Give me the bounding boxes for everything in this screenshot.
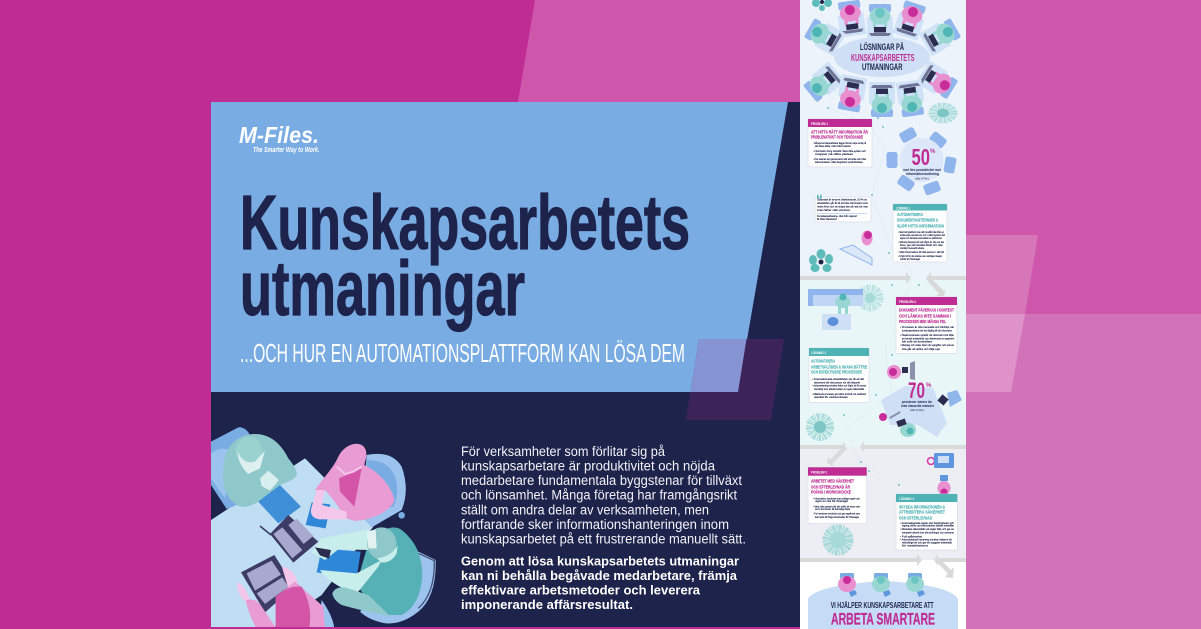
card: solution 3: mänskliga fel och ger ett tryggare arbetssätt [902,540,952,544]
card: solution 1: • Sökning baserat på vad något är, inte var det [898,240,944,244]
text block: intro: och lönsamhet. Många företag har framgångsrikt [461,488,737,503]
card: solution 3: komplett historik över alla ändringar och versioner [902,530,954,534]
card: problem 1: ATT HITTA RÄTT INFORMATION ÄR [811,128,868,134]
table [211,458,373,629]
text block: intro: ställt om andra delar av verksamheten, men [461,502,709,517]
card: solution 3: för medarbetarna [902,544,929,548]
card: solution 2 [809,348,869,402]
person: top left, teal [211,427,301,523]
card: solution 3: SKYDDA INFORMATIONEN & [899,504,945,509]
person: bottom right, teal [312,527,436,623]
card: problem 3: ARBETET MED SÄKERHET [811,478,854,484]
card: solution 3: • Automatiserade regler styr behörigheter och [900,521,954,525]
card: solution 3: LÖSNING 3 [899,496,914,501]
text block: intro: kunskapsarbetet på ett frustrerande manuellt sätt. [461,532,746,546]
logo: M-Files: The Smarter Way to Work. [253,147,320,154]
card: problem 2: blir svår att kontrollera [902,339,933,343]
card: problem 3: POÄNG I WORKOKOCKE [811,488,851,494]
card: problem 2: PROCESSER MED MÅNGA FEL [899,318,946,324]
card: solution 2: LÖSNING 2 [811,350,826,355]
card: solution 2: samtidigt som efterlevnaden av regler säkerställs [814,387,865,391]
panel: light blue title area [211,102,788,392]
icon: blue chair person [937,390,962,407]
card: problem 3: utgör en risk för företaget [815,499,848,503]
icon: teal person at laptop [896,418,916,437]
card: problem 3: som kommer åt känslig data [815,507,851,511]
stat: 70 percent [879,361,962,437]
text block: intro: medarbetare fundamentala byggstenar för tillväxt [461,473,742,488]
title: utmaningar [240,246,525,332]
quote card: inte hittar rätt version. [817,208,851,212]
stat: 70 percent: % [926,383,932,389]
card: problem 2 [896,297,957,354]
text block: bold conclusion: effektivare arbetsmetoder och leverera [461,582,701,598]
laptop [260,515,318,563]
title [240,180,690,332]
card: solution 2: • Automatisering minskar felen och frigör tid för annat [812,384,866,388]
logo: M-Files: M-Files. [239,122,319,148]
text block: bold conclusion: imponerande affärsresultat. [461,597,633,612]
icon: pink person left [879,411,901,421]
card: problem 3 [808,467,867,523]
card: solution 1: värde för företaget [900,257,920,261]
stat: 50 percent: informationssökning [906,172,939,176]
card: solution 3 [896,494,957,550]
icon: pink person with blue laptop [938,475,950,496]
panel: closing section [808,573,958,629]
card: solution 1: • Frigör tid för det arbete som verkligen skapar [898,254,942,258]
card: solution 1 [893,204,947,262]
card: problem 2: ett korrekt arbetsflöde och efterlevnad av regelverk [902,336,955,340]
card: solution 1: onödigt manuellt arbete [900,246,924,250]
background: lighter parallelogram top [518,0,1201,314]
card: problem 1 [808,119,872,167]
card: problem 2: DOKUMENT PÅVERKAS I KONTEXT [899,307,954,313]
subtitle: ...OCH HUR EN AUTOMATIONSPLATTFORM KAN LÖSA DEM [240,340,685,368]
panel: infographic thumbnail strip [800,0,966,629]
card: problem 2: • Ökade kostnader uppstår när dokument inte följer [900,333,954,337]
stat: 50 percent [886,126,957,196]
card: problem 3: • Fel versioner används och ger regelbrott som [813,512,861,516]
quote card: M-Files Research [817,217,837,221]
card: problem 2: • Processer är ofta manuella och fördröjs när [900,325,954,329]
text block: intro [461,444,746,546]
text block: intro: kunskapsarbetare är produktivitet och nöjda [461,458,715,474]
card: solution 1: enda plats oavsett var och i vilket system det [900,233,945,237]
illustration: people around a table [211,427,436,629]
card: problem 1: att leta efter rätt information [815,144,852,148]
accent parallelogram [686,339,784,420]
card: solution 1: AUTOMATISERA [897,212,923,217]
card: solution 2: resultat för verksamheten [814,395,849,399]
tablet [241,555,288,612]
closing headline: ARBETA SMARTARE [831,610,935,628]
card: problem 3: kan leda till höga kostnader för företaget [815,515,859,519]
card: problem 2: PROBLEM 2 [899,300,916,304]
card: solution 2: AUTOMATISERA [811,359,835,364]
oval title: KUNSKAPSARBETETS [851,53,915,64]
card: problem 1: • Det saknas ett gemensamt sätt att söka och hitta [813,157,866,161]
stat: 50 percent: % [930,149,936,155]
card: solution 1: • Rätt information till rätt person i rätt tid [898,250,944,254]
stat: 70 percent: (källa: M-Files) [910,409,924,412]
person: bottom, pink [237,566,334,629]
panel: report cover [211,102,800,629]
quote card: Kunskapsarbetare, citat från rapport [817,214,857,218]
oval title: LÖSNINGAR PÅ [860,42,904,52]
card: problem 1: PROBLEM 1 [811,122,828,126]
icon: pink person at laptop [887,361,915,380]
card: solution 3: • Full spårbarhet [900,534,922,538]
stat: 70 percent: presterar sämre än [902,400,932,404]
card: solution 2: dokument når rätt person vid rätt tidpunkt [814,380,860,384]
stat: 70 percent: 70 [908,378,925,403]
quote card: redan finns och att skapa den på nytt när man [817,204,868,208]
icon: bench with person and desk [808,289,863,330]
card: solution 1: SLIPP HITTA INFORMATION [897,224,945,228]
background: small translucent parallelogram [960,235,1038,392]
background: lighter lower right band [966,314,1201,629]
card: solution 2: OCH EFFEKTIVARE PROCESSER [811,369,862,374]
connector dots [827,78,920,486]
closing headline: VI HJÄLPER KUNSKAPSARBETARE ATT [831,601,934,610]
card: problem 2: inte går att spåra och följa upp [902,347,941,351]
card: problem 2: kunskapsarbetare inte har tillgång till rätt information [902,329,952,333]
text block: intro: fortfarande sker informationshanteringen inom [461,517,729,532]
people at closing table [838,573,925,597]
quote card: arbetstiden går åt till att hitta information som [817,201,869,205]
separator arrows [800,272,966,578]
card: solution 3: OCH EFTERLEVNAD [899,515,932,520]
people around oval table [802,0,962,118]
card: solution 1: lagras och hanteras automatiskt av plattformen [900,236,942,240]
card: solution 1: finns, ger rätt resultat direkt och utan [900,243,943,247]
quote card: Sökandet är enormt tidskrävande, 50 % av [817,198,868,202]
card: solution 3: • Metadata säkerställer att regler följs och ger en [900,527,954,531]
oval title: UTMANINGAR [862,62,903,72]
card: problem 1: • Många kunskapsarbetare lägger timmar varje vecka på [813,141,866,145]
card: problem 3: • Information hanteras utan tydliga regler och [813,496,860,500]
card: solution 3: ATTRIBUTERA SÄKERHET [899,509,945,515]
text block: intro: För verksamheter som förlitar sig på [461,444,665,459]
card: solution 1: LÖSNING 1 [896,206,910,210]
stat: 70 percent: med manuella metoder [901,404,935,408]
card: problem 3: • Med olika system blir det svårt att styra vem [813,504,861,508]
stat: 50 percent: med före produktivitet med [903,168,941,172]
card: solution 2: • Automatiserade arbetsflöden ser till att rätt [812,377,864,381]
stat: 50 percent: (källa: M-Files) [915,178,929,180]
card: solution 2: ARBETSFLÖDEN & SKAPA BÄTTRE [811,363,867,369]
card: problem 1: • Information finns utspridd i flera olika system och [813,149,866,153]
oval title [834,37,930,77]
icon: blue device with pink handle [928,453,954,468]
stat: 50 percent: 50 [912,144,930,170]
card: problem 3: PROBLEM 3 [811,470,827,474]
card: problem 1: mappar på olika platser [815,152,853,156]
card: problem 3: OCH EFTERLEVNAD ÄR [811,483,850,489]
card: solution 2: • Effektivare processer ger bättre kontroll och snabbare [812,392,866,396]
quote card [815,191,871,222]
card: problem 1: PROBLEMATISKT OCH TIDSÖDANDE [811,133,863,139]
person: top right, pink [306,444,406,528]
text block: bold conclusion [461,554,739,612]
text block: bold conclusion: Genom att lösa kunskapsarbetets utmaningar [461,554,739,568]
card: solution 3: lagring utifrån vad informationen faktiskt innehåller [902,524,954,528]
card: solution 1: DOKUMENTHANTERINGEN & [897,218,938,222]
card: solution 3: • Automatiserad hantering minskar riskerna för [900,538,952,542]
icon: pink person with tray [840,230,872,265]
card: problem 1: dokumentation, vilket begränsar produktiviteten [815,160,863,164]
card: problem 2: • Misstag och risker ökar när uppgifter och ansvar [900,343,954,347]
plant icons [809,0,951,548]
closing headline [831,601,935,628]
text block: bold conclusion: kan ni behålla begåvade medarbetare, främja [461,568,738,583]
title: Kunskapsarbetets [240,180,690,266]
card: problem 2: OCH LÄNKAS INTE SAMMAN I [899,313,951,319]
card: solution 1: • Med rätt plattform kan allt innehåll nås från en [898,230,944,234]
quote card: “ [816,191,823,207]
